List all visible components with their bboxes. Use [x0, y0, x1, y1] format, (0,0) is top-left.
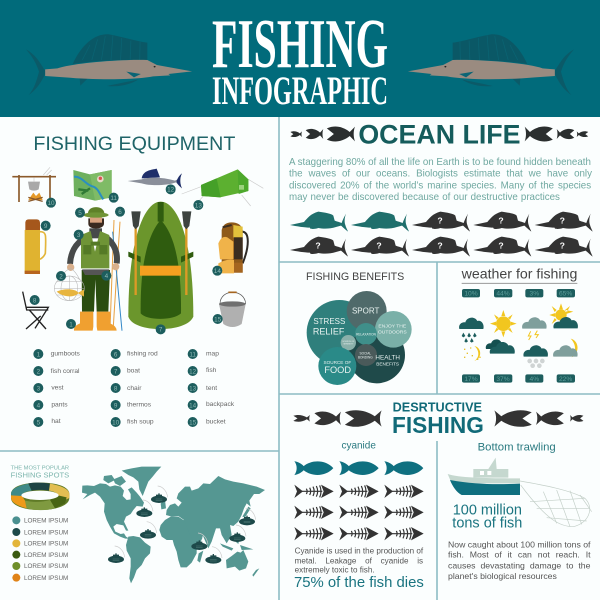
paragraph: may never be discovered because of our destructive practices	[289, 192, 560, 203]
number badges on equipment: 8	[33, 297, 37, 304]
trawling text	[448, 539, 591, 581]
panel: destructive fishing	[293, 401, 592, 591]
equipment legend list: 6	[114, 351, 118, 358]
fish grid: ?	[437, 240, 443, 250]
icon: fish corral	[54, 268, 84, 301]
map markers	[108, 486, 256, 564]
panel: weather for fishing	[459, 266, 578, 383]
left marlin	[26, 34, 192, 95]
title: FISHING	[212, 6, 388, 83]
donut legend	[12, 516, 68, 582]
heading: FISHING EQUIPMENT	[33, 133, 235, 155]
cyanide text: metal. Leakage of cyanide is	[295, 556, 423, 565]
bubble chart	[307, 291, 412, 385]
equipment legend list: gumboots	[51, 351, 81, 358]
percent pills	[462, 289, 575, 383]
icon: trawler boat	[448, 458, 520, 495]
equipment legend list: 7	[114, 368, 118, 375]
equipment legend list: 11	[189, 351, 196, 358]
equipment legend list: map	[206, 351, 219, 358]
equipment legend list: 2	[37, 368, 41, 375]
trawling text: planet's biological resources	[448, 571, 558, 581]
fish grid: ?	[437, 215, 443, 225]
equipment legend list: chair	[127, 385, 142, 392]
icon: rain cloud	[459, 318, 484, 343]
equipment legend list: 8	[114, 385, 118, 392]
number badges on equipment: 9	[44, 223, 48, 230]
icon: storm clouds	[486, 339, 515, 354]
title: INFOGRAPHIC	[212, 68, 388, 113]
right marlin	[408, 34, 574, 95]
donut legend: LOREM IPSUM	[24, 563, 68, 570]
number badges on equipment: 13	[195, 202, 202, 209]
icon: fisherman	[67, 207, 119, 331]
fish grid: ?	[498, 240, 504, 250]
number badges on equipment: 15	[214, 316, 222, 323]
paragraph: the waves of our oceans. Biologists estimate that we have only	[289, 169, 592, 180]
number badges on equipment: 4	[105, 273, 109, 280]
number badges on equipment: 11	[110, 195, 117, 202]
equipment legend list: 3	[37, 385, 41, 392]
heading: THE MOST POPULAR	[11, 465, 69, 471]
bubble chart: RELIEF	[313, 326, 345, 336]
equipment legend list: fish soup	[127, 418, 154, 425]
column: bottom trawling: Bottom trawling	[478, 441, 556, 453]
equipment legend list: boat	[127, 367, 140, 374]
icon: map	[73, 170, 112, 201]
icon: sun behind cloud	[549, 303, 578, 328]
bubble chart: SOURCE OF	[323, 360, 351, 365]
icon: boat with oars	[128, 202, 193, 329]
percent pills: 10%	[464, 291, 478, 298]
number badges on equipment: 10	[47, 200, 55, 207]
donut legend: LOREM IPSUM	[24, 552, 68, 559]
column: cyanide	[294, 440, 424, 591]
donut chart	[11, 483, 69, 510]
heading	[11, 465, 69, 480]
icon: fish soup	[12, 167, 56, 202]
cyanide text	[295, 546, 424, 575]
number badges on equipment: 2	[59, 273, 63, 280]
trawling statistic: tons of fish	[452, 516, 522, 532]
decorative fish left	[293, 410, 382, 427]
trawling statistic: 100 million	[453, 502, 522, 518]
icon: tent	[182, 169, 263, 206]
column: cyanide: cyanide	[341, 440, 376, 451]
trawling statistic	[452, 502, 522, 532]
bubble chart: BENEFITS	[376, 361, 399, 366]
panel: fishing equipment	[12, 133, 263, 334]
fish grid	[290, 212, 593, 257]
donut legend: LOREM IPSUM	[24, 540, 68, 547]
percent pills: 3%	[530, 291, 539, 298]
fish grid: ?	[315, 240, 321, 250]
bubble chart: SOCIAL	[360, 351, 371, 355]
trawling text: causes devastating damage to the	[448, 560, 591, 570]
number badges on equipment: 3	[77, 232, 81, 239]
number badges on equipment: 7	[159, 327, 163, 334]
bubble chart: SPORT	[352, 306, 379, 315]
bubble chart: SERENITY	[343, 344, 354, 346]
living fish row	[294, 461, 423, 475]
number badges on equipment: 1	[69, 321, 73, 328]
percent pills: 37%	[496, 376, 510, 383]
decorative fish right	[494, 410, 583, 427]
heading: FISHING	[392, 412, 484, 438]
number badges on equipment	[30, 184, 223, 334]
equipment legend list: 4	[37, 402, 41, 409]
number badges on equipment: 14	[214, 268, 221, 275]
equipment legend list: 1	[37, 351, 41, 358]
decorative fish left	[290, 127, 355, 141]
icon: bucket	[219, 292, 246, 327]
percent pills: 17%	[464, 376, 478, 383]
number badges on equipment: 6	[118, 209, 122, 216]
equipment legend list: 12	[189, 368, 197, 375]
header banner	[0, 0, 600, 117]
equipment legend list: vest	[51, 384, 64, 391]
bubble chart: RELAXATION	[356, 332, 377, 336]
equipment legend list: bucket	[206, 418, 226, 425]
trawling text: Now caught about 100 million tons of	[448, 539, 591, 549]
trawling text: fish. Most of it can not reach. It	[448, 550, 591, 560]
paragraph	[289, 157, 592, 203]
donut legend: LOREM IPSUM	[24, 529, 68, 536]
equipment legend list	[33, 349, 235, 427]
fish grid: ?	[498, 215, 504, 225]
bubble chart: HEALTH	[375, 355, 400, 362]
icon: trawl net	[520, 481, 592, 527]
fish grid: ?	[560, 240, 565, 250]
equipment legend list: backpack	[206, 401, 235, 408]
icon: moon and stars	[464, 346, 481, 361]
cyanide text: Cyanide is used in the production of	[295, 546, 424, 555]
donut legend: LOREM IPSUM	[24, 575, 68, 582]
icon: thermos	[25, 219, 46, 274]
fish grid: ?	[560, 215, 565, 225]
number badges on equipment: 5	[78, 210, 82, 217]
equipment legend list: tent	[206, 385, 217, 392]
icon: chair	[23, 292, 48, 329]
title	[212, 6, 388, 113]
equipment legend list: thermos	[127, 401, 152, 408]
heading: FISHING SPOTS	[11, 471, 69, 480]
paragraph: discovered 20% of the world’s marine species. Many of the species	[289, 180, 591, 191]
panel: ocean life	[289, 119, 593, 257]
equipment legend list: hat	[51, 418, 61, 425]
percent pills: 4%	[530, 376, 539, 383]
fish grid: ?	[376, 240, 382, 250]
equipment legend list: fish corral	[51, 368, 80, 375]
panel: fishing spots	[11, 465, 265, 583]
icon: fishing rods	[110, 220, 122, 331]
icon: snow cloud	[523, 345, 548, 368]
column: bottom trawling	[448, 441, 592, 581]
equipment legend list: 10	[112, 419, 120, 426]
bubble chart: SOURCE OF	[342, 341, 355, 343]
equipment legend list: 9	[114, 402, 118, 409]
bubble chart: ENJOY THE	[378, 324, 407, 330]
icon: sun	[490, 310, 517, 337]
equipment legend list: 13	[189, 385, 197, 392]
panel: fishing benefits	[306, 271, 412, 385]
heading	[392, 401, 484, 438]
equipment legend list: pants	[51, 401, 68, 408]
equipment legend list: 5	[37, 419, 41, 426]
heading: DESRTUCTIVE	[393, 401, 482, 415]
heading: weather for fishing	[461, 266, 577, 282]
bubble chart: OUTDOORS	[378, 329, 407, 335]
icon: backpack	[218, 222, 248, 273]
number badges on equipment: 12	[167, 187, 175, 194]
world map	[82, 467, 265, 583]
paragraph: A staggering 80% of all the life on Earth is to be found hidden beneath	[289, 157, 591, 168]
cyanide statistic: 75% of the fish dies	[294, 575, 424, 591]
bubble chart: BONDING	[358, 355, 373, 359]
icon: moon behind cloud	[553, 339, 578, 357]
equipment legend list: 14	[189, 402, 197, 409]
cyanide text: extremely toxic to fish.	[295, 566, 375, 575]
equipment legend list: fishing rod	[127, 351, 158, 358]
equipment legend list: 15	[189, 419, 197, 426]
bubble chart: FOOD	[324, 365, 351, 375]
fish skeleton rows	[294, 485, 424, 540]
heading: FISHING BENEFITS	[306, 271, 404, 283]
bubble chart: STRESS	[313, 317, 345, 326]
percent pills: 44%	[496, 291, 510, 298]
percent pills: 22%	[559, 376, 572, 383]
icon: lightning cloud	[522, 317, 547, 340]
percent pills: 65%	[559, 291, 572, 298]
decorative fish right	[525, 127, 588, 141]
equipment legend list: fish	[206, 367, 217, 374]
icon: marlin	[128, 169, 182, 188]
heading: OCEAN LIFE	[358, 119, 521, 149]
donut legend: LOREM IPSUM	[24, 518, 68, 525]
